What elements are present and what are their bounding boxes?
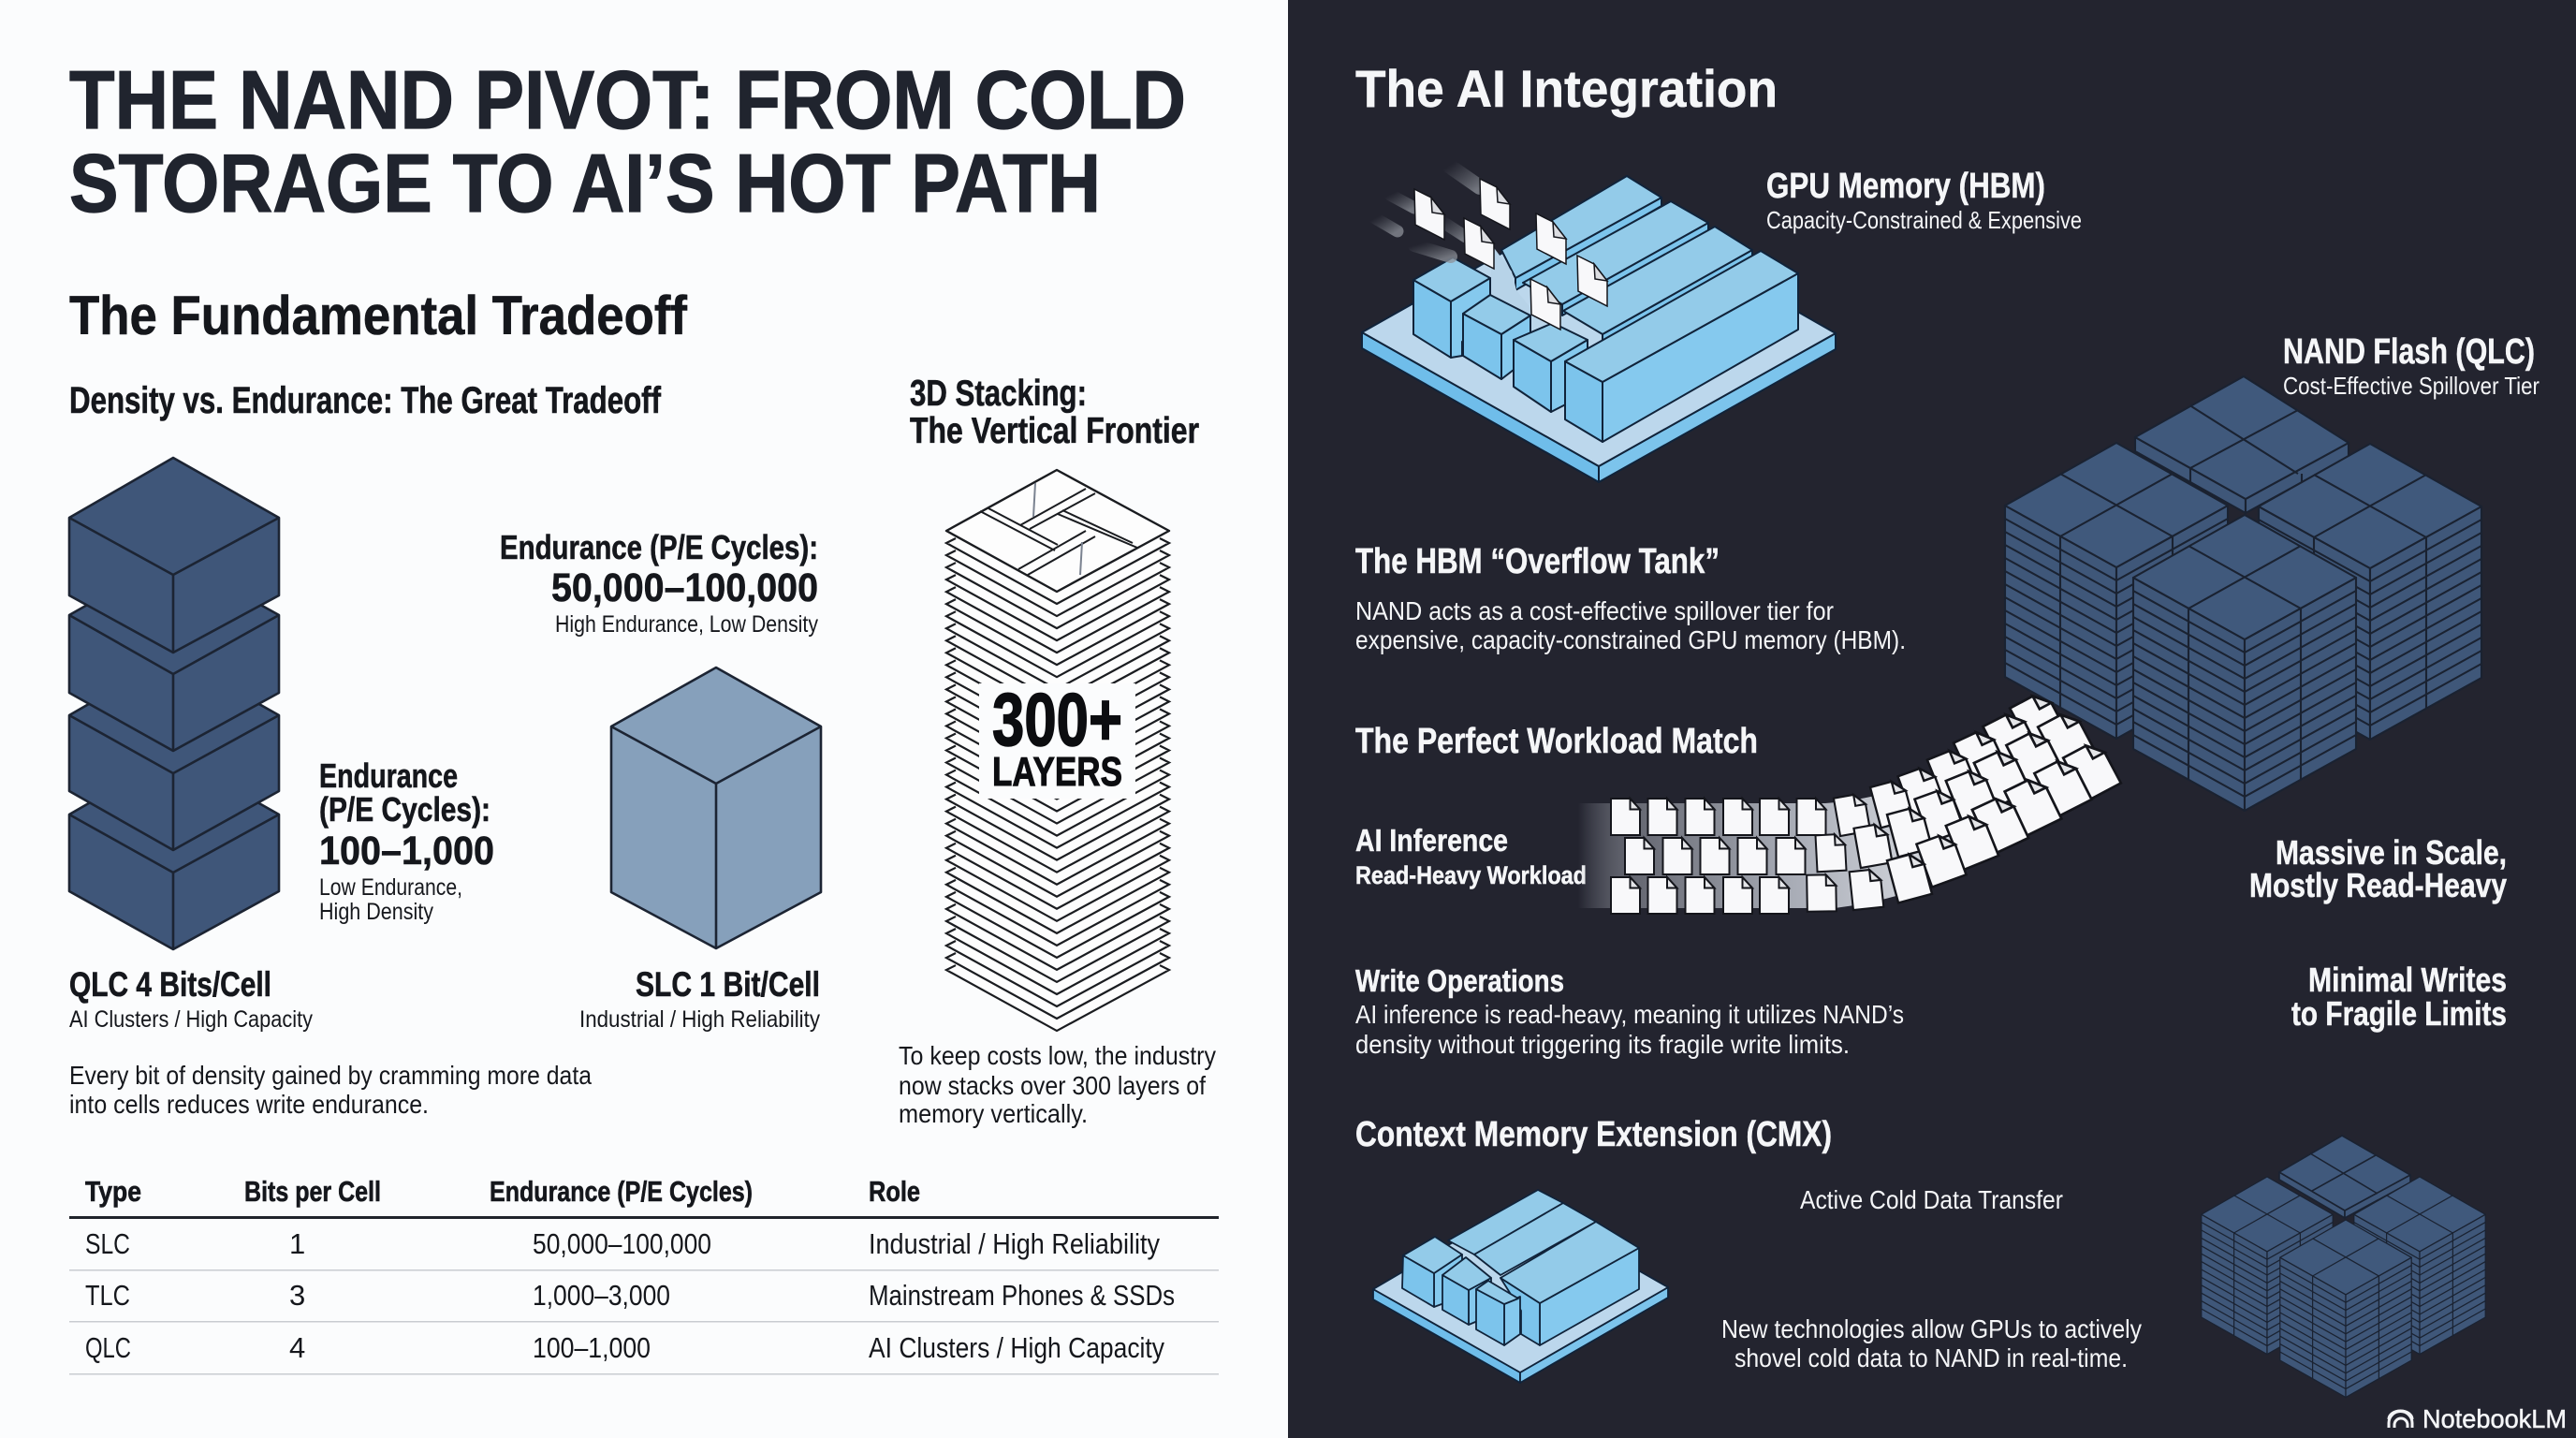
title: STORAGE TO AI’S HOT PATH xyxy=(69,137,1101,229)
heading: density vs endurance: Density vs. Endurance: The Great Tradeoff xyxy=(69,380,662,421)
table row: QLC: 4 xyxy=(289,1331,305,1364)
text: overflow tank xyxy=(1355,542,1906,654)
heading: the AI integration: The AI Integration xyxy=(1355,59,1778,118)
stat: 300+ layers: LAYERS xyxy=(992,749,1122,795)
callout: QLC endurance: (P/E Cycles): xyxy=(319,790,490,829)
title xyxy=(69,53,1186,229)
table header xyxy=(85,1175,920,1208)
panel: left background xyxy=(0,0,1288,1438)
callout: QLC endurance: 100–1,000 xyxy=(319,829,494,873)
text: density explanation: Every bit of density gained by cramming more data xyxy=(69,1061,592,1090)
text: CMX explanation: New technologies allow GPUs to actively xyxy=(1721,1314,2142,1343)
label: QLC: QLC 4 Bits/Cell xyxy=(69,965,271,1004)
table row: TLC: Mainstream Phones & SSDs xyxy=(869,1279,1175,1312)
text: CMX explanation xyxy=(1721,1314,2142,1372)
label: NAND flash xyxy=(2283,332,2539,400)
label: minimal writes: Minimal Writes xyxy=(2308,961,2507,999)
panel: right background xyxy=(1288,0,2576,1438)
label: GPU memory: GPU Memory (HBM) xyxy=(1766,167,2045,206)
text: stacking explanation xyxy=(899,1041,1216,1128)
text: CMX explanation: shovel cold data to NAND in real-time. xyxy=(1734,1343,2128,1372)
callout: QLC endurance xyxy=(319,756,494,925)
label: QLC xyxy=(69,965,313,1033)
label: SLC: Industrial / High Reliability xyxy=(579,1006,820,1033)
table row: TLC: 3 xyxy=(289,1279,305,1312)
label: minimal writes: to Fragile Limits xyxy=(2291,994,2507,1033)
arrow: document stream from AI inference to NAND xyxy=(1578,690,2121,914)
table row: QLC xyxy=(85,1331,1164,1364)
label: massive in scale xyxy=(2249,833,2507,904)
stat: 300+ layers: 300+ xyxy=(992,678,1122,761)
text: overflow tank: expensive, capacity-constrained GPU memory (HBM). xyxy=(1355,625,1906,654)
table header: Type xyxy=(85,1175,141,1208)
table row: TLC: 1,000–3,000 xyxy=(533,1279,670,1312)
table row: TLC: TLC xyxy=(85,1279,130,1312)
label: AI inference xyxy=(1355,823,1587,889)
text: write operations: AI inference is read-heavy, meaning it utilizes NAND’s xyxy=(1355,1000,1904,1029)
callout: SLC endurance xyxy=(500,528,818,638)
icon: SLC cube xyxy=(611,668,821,948)
heading: perfect workload match: The Perfect Workload Match xyxy=(1355,722,1758,761)
label: QLC: AI Clusters / High Capacity xyxy=(69,1006,313,1033)
text: density explanation xyxy=(69,1061,592,1119)
table row: SLC: 1 xyxy=(289,1227,305,1260)
text: stacking explanation: memory vertically. xyxy=(899,1099,1088,1128)
text: write operations xyxy=(1355,963,1904,1059)
heading: context memory extension: Context Memory Extension (CMX) xyxy=(1355,1115,1832,1154)
title: THE NAND PIVOT: FROM COLD xyxy=(69,53,1186,146)
stat: 300+ layers xyxy=(979,678,1135,799)
label: GPU memory xyxy=(1766,167,2082,234)
callout: SLC endurance: 50,000–100,000 xyxy=(551,565,818,610)
icon: documents entering GPU memory xyxy=(1414,179,1607,330)
label: NAND flash: Cost-Effective Spillover Tier xyxy=(2283,372,2539,400)
label: AI inference: Read-Heavy Workload xyxy=(1355,861,1587,889)
text: write operations: Write Operations xyxy=(1355,963,1564,998)
heading: the fundamental tradeoff: The Fundamental Tradeoff xyxy=(69,286,688,346)
callout: SLC endurance: High Endurance, Low Density xyxy=(555,611,818,638)
callout: QLC endurance: Endurance xyxy=(319,756,458,795)
logo: NotebookLM: NotebookLM xyxy=(2422,1404,2567,1433)
text: stacking explanation: To keep costs low, the industry xyxy=(899,1041,1216,1070)
icon: 3D layer stack xyxy=(946,470,1169,1031)
table row: QLC: QLC xyxy=(85,1331,131,1364)
icon: GPU memory chip xyxy=(1362,176,1836,482)
label: active cold data transfer: Active Cold Data Transfer xyxy=(1800,1185,2063,1214)
callout: QLC endurance: High Density xyxy=(319,899,433,925)
table: NAND types xyxy=(69,1175,1219,1374)
label: SLC: SLC 1 Bit/Cell xyxy=(636,965,820,1004)
table row: QLC: 100–1,000 xyxy=(533,1331,651,1364)
table row: TLC xyxy=(85,1279,1175,1312)
table header: Bits per Cell xyxy=(244,1175,381,1208)
callout: QLC endurance: Low Endurance, xyxy=(319,874,462,901)
panel: fundamental tradeoff xyxy=(69,53,1219,1374)
table row: SLC: Industrial / High Reliability xyxy=(869,1227,1160,1260)
label: SLC xyxy=(579,965,820,1033)
icon: CMX GPU chip xyxy=(1373,1190,1668,1383)
label: massive in scale: Massive in Scale, xyxy=(2276,833,2507,872)
heading: 3D stacking: The Vertical Frontier xyxy=(910,411,1199,451)
table row: SLC: 50,000–100,000 xyxy=(533,1227,711,1260)
table row: QLC: AI Clusters / High Capacity xyxy=(869,1331,1164,1364)
table header: Role xyxy=(869,1175,920,1208)
icon: data trails xyxy=(1375,166,1480,257)
table row: SLC xyxy=(85,1227,1160,1260)
icon: NAND flash stacks xyxy=(2005,376,2481,811)
text: overflow tank: The HBM “Overflow Tank” xyxy=(1355,542,1720,581)
callout: SLC endurance: Endurance (P/E Cycles): xyxy=(500,528,818,566)
text: write operations: density without triggering its fragile write limits. xyxy=(1355,1030,1850,1059)
text: overflow tank: NAND acts as a cost-effective spillover tier for xyxy=(1355,596,1834,625)
panel: the AI integration xyxy=(1355,59,2567,1433)
table row: SLC: SLC xyxy=(85,1227,130,1260)
heading: 3D stacking xyxy=(910,374,1199,451)
label: massive in scale: Mostly Read-Heavy xyxy=(2249,866,2507,904)
heading: 3D stacking: 3D Stacking: xyxy=(910,374,1087,414)
label: AI inference: AI Inference xyxy=(1355,823,1508,858)
table header: Endurance (P/E Cycles) xyxy=(490,1175,753,1208)
icon: CMX NAND stacks xyxy=(2202,1136,2485,1398)
label: minimal writes xyxy=(2291,961,2507,1033)
label: GPU memory: Capacity-Constrained & Expensive xyxy=(1766,206,2082,234)
text: stacking explanation: now stacks over 300 layers of xyxy=(899,1071,1206,1100)
icon: QLC stacked cubes xyxy=(69,458,279,949)
text: density explanation: into cells reduces write endurance. xyxy=(69,1090,429,1119)
